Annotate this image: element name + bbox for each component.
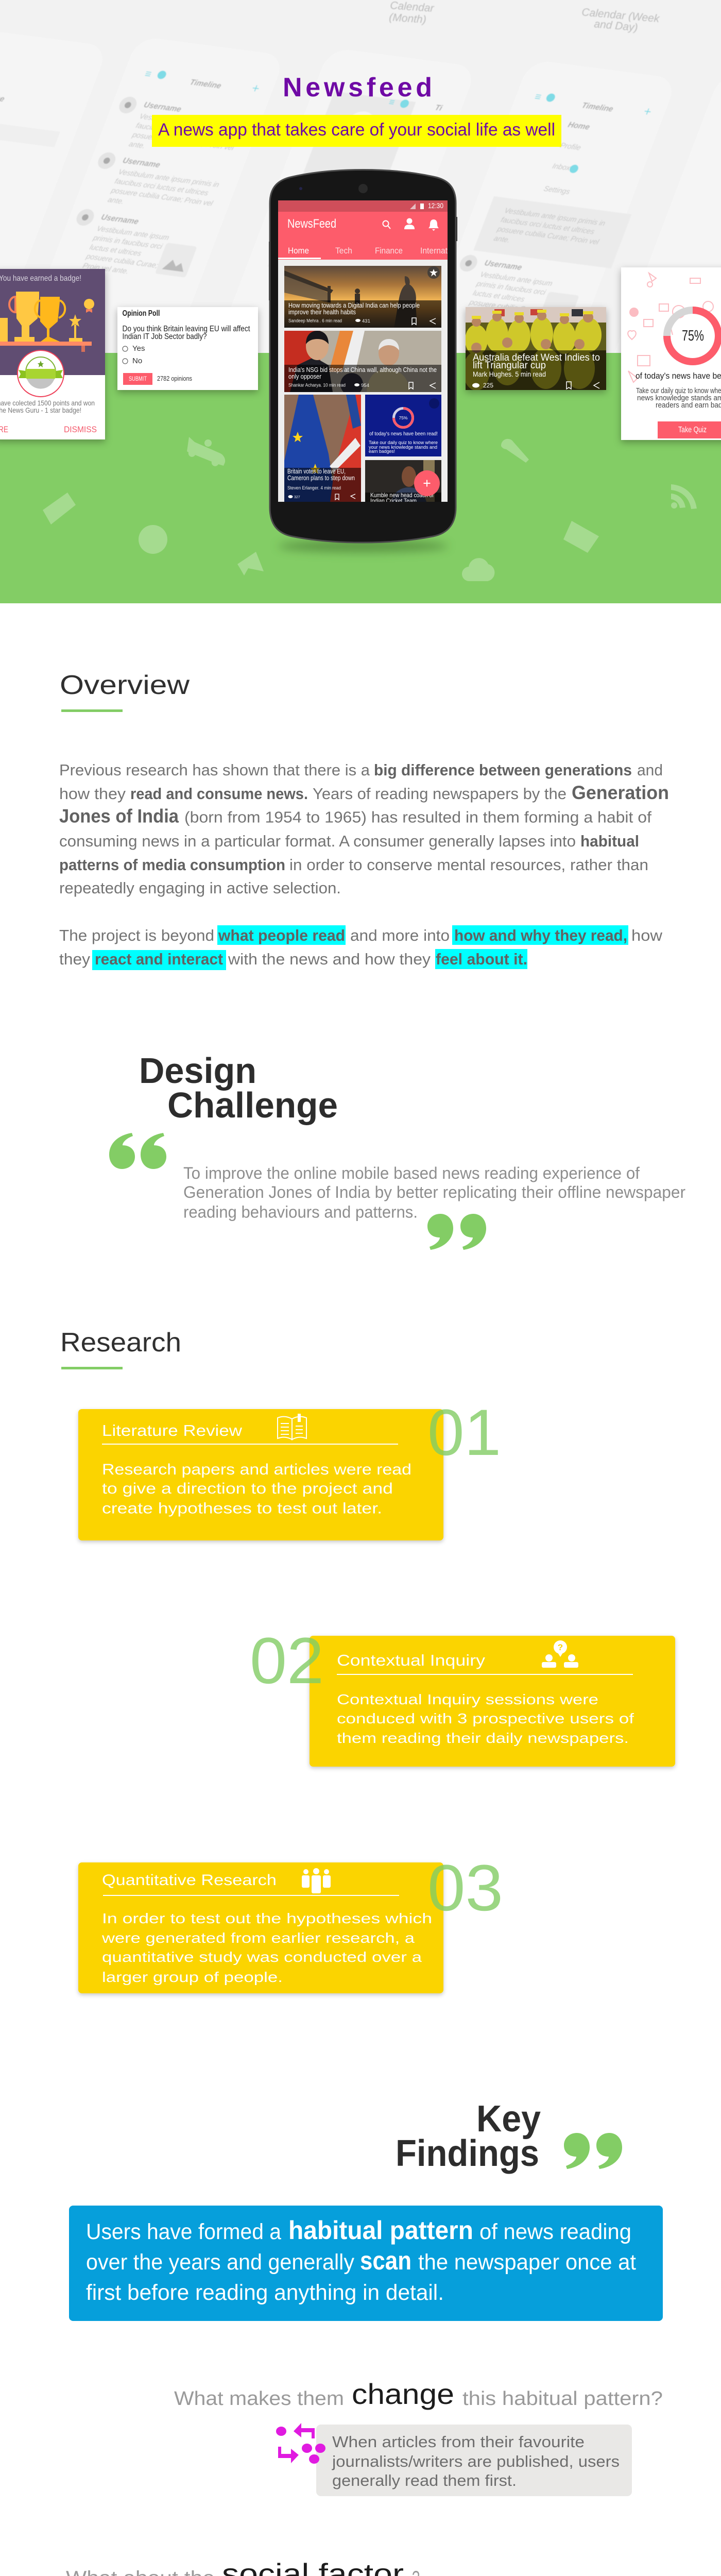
heading: overview: Overview — [60, 670, 190, 700]
article: Kumble: Indian Cricket Team — [370, 497, 417, 504]
paragraph: background: read and consume news. — [130, 785, 308, 803]
icon: closing quote — [564, 2133, 622, 2169]
article: Britain votes: Steven Erlanger. 4 min read — [287, 485, 341, 491]
paragraph: background: Years of reading newspapers by the — [313, 785, 566, 803]
wireframe phones backdrop: faucibus orci luctus et ultrices — [500, 216, 596, 236]
wireframe phones backdrop: Proin vel ante. — [81, 262, 130, 276]
card: literature review — [78, 1396, 501, 1540]
status bar — [278, 200, 448, 212]
question heading — [174, 2378, 663, 2410]
icon: basketball — [139, 525, 167, 554]
question heading: What makes them — [174, 2388, 344, 2410]
paragraph: background: in order to conserve mental resources, rather than — [289, 856, 648, 874]
wireframe phones backdrop: ante. — [492, 234, 511, 245]
card: quantitative research: were generated from earlier research, a — [101, 1930, 415, 1946]
article: Britain votes: 327 — [294, 496, 300, 499]
heading: research: Research — [60, 1328, 181, 1358]
question heading: change — [352, 2378, 454, 2410]
paragraph: project focus with highlights: how and why they read, — [454, 926, 627, 944]
article: daily quiz — [365, 395, 441, 456]
icon: newspaper — [43, 493, 76, 524]
wireframe phones backdrop: faucibus orci luctus et ultrices — [113, 177, 210, 197]
wireframe phones backdrop: Username — [121, 156, 162, 170]
paragraph: background: Previous research has shown that there is a — [59, 761, 370, 779]
app bar — [278, 212, 448, 260]
article: NSG bid: Shankar Acharya. 10 min read — [288, 382, 346, 388]
section: key findings — [69, 2098, 663, 2321]
phone mockup — [269, 170, 457, 543]
card: earned badge: DISMISS — [64, 425, 97, 434]
card: literature review: Literature Review — [102, 1421, 243, 1439]
icon: rss dot — [671, 502, 677, 509]
wireframe phones backdrop: posuere cubilia Curae; — [84, 252, 159, 270]
paragraph: background: Jones of India — [59, 806, 179, 826]
question heading — [66, 2557, 420, 2576]
icon: inquiry people: ? — [558, 1642, 563, 1652]
callout: habitual pattern: the newspaper once at — [418, 2250, 636, 2275]
article: digital india — [284, 266, 441, 328]
article: Kumble — [365, 460, 441, 504]
paragraph: project focus with highlights: react and interact — [95, 950, 223, 968]
app bar: Tech — [335, 246, 352, 256]
paragraph: project focus with highlights: and more into — [350, 926, 450, 944]
article: Britain votes: Britain votes to leave EU, — [287, 468, 346, 475]
wireframe phones backdrop: + — [641, 105, 654, 119]
wireframe phones backdrop: Proin vel ante. — [465, 308, 513, 321]
paragraph: project focus with highlights — [59, 925, 663, 970]
challenge statement — [183, 1164, 685, 1221]
icon: closing quote — [427, 1214, 486, 1250]
answer box — [316, 2425, 632, 2496]
card: opinion poll: Opinion Poll — [123, 309, 160, 318]
wireframe phones backdrop: Vestibulum ante ipsum primis in — [503, 207, 607, 228]
icon: change arrows — [276, 2423, 325, 2464]
article: digital india: How moving towards a Digital India can help people — [288, 301, 420, 309]
callout: habitual pattern: scan — [360, 2246, 411, 2275]
phone shadow — [278, 540, 448, 552]
challenge statement: Generation Jones of India by better replicating their offline newspaper — [183, 1183, 685, 1201]
card: earned badge: You have earned a badge! — [0, 274, 81, 283]
card: quantitative research: quantitative study was conducted over a — [102, 1949, 422, 1965]
card: Australia team news: 225 — [483, 382, 493, 389]
card: Australia team news — [463, 307, 606, 391]
card: literature review: Research papers and articles were read — [102, 1461, 411, 1478]
tagline banner — [152, 115, 561, 147]
hero background — [0, 0, 721, 603]
paragraph: background: how they — [59, 785, 126, 803]
paragraph: background: repeatedly engaging in active selection. — [59, 879, 341, 897]
section: design challenge — [109, 1050, 685, 1250]
wireframe phones backdrop: Home — [566, 121, 591, 132]
answer box: generally read them first. — [332, 2471, 517, 2489]
wireframe phones backdrop: Username — [483, 259, 523, 272]
floating add button — [414, 470, 440, 496]
icon: megaphone — [237, 552, 264, 575]
icon: camera — [563, 521, 599, 553]
background icons on green — [43, 437, 697, 581]
wireframe phones backdrop: ante. — [128, 140, 146, 150]
card: contextual inquiry: them reading their daily newspapers. — [337, 1730, 629, 1746]
card: daily quiz — [621, 267, 721, 440]
paragraph: project focus with highlights: The project is beyond — [59, 926, 214, 944]
icon: opening quote — [109, 1133, 166, 1169]
challenge statement: To improve the online mobile based news reading experience of — [183, 1164, 640, 1182]
wireframe phones backdrop: + — [249, 81, 262, 96]
card: quantitative research: larger group of people. — [102, 1969, 283, 1985]
number 03: 03 — [427, 1851, 503, 1924]
finding: social factor — [66, 2557, 507, 2576]
wireframe phones backdrop: and Day) — [594, 18, 638, 33]
paragraph: background: and — [637, 761, 663, 779]
paragraph: project focus with highlights: with the news and how they — [228, 950, 431, 968]
card: contextual inquiry: Contextual Inquiry — [337, 1651, 486, 1669]
icon: bell — [428, 219, 439, 231]
card: opinion poll: 2782 opinions — [157, 375, 192, 382]
heading: design challenge: Challenge — [167, 1085, 338, 1125]
article: digital india: 431 — [362, 318, 370, 324]
card: Australia team news: lift Triangular cup — [473, 360, 546, 371]
article: digital india: improve their health habits — [288, 308, 356, 316]
card: literature review: create hypotheses to test out later. — [102, 1500, 382, 1517]
wireframe phones backdrop: posuere c — [378, 178, 414, 190]
wireframe phones backdrop: Vestibulum ante ipsum primis in — [138, 112, 242, 133]
quiz donut chart: 75% — [682, 328, 704, 344]
wireframe phones backdrop: Timeline — [188, 78, 223, 91]
card: contextual inquiry: conduced with 3 prospective users of — [337, 1710, 634, 1726]
card: opinion poll: Do you think Britain leaving EU will affect — [123, 325, 250, 333]
paragraph: background: Generation — [572, 782, 669, 803]
callout: habitual pattern: habitual pattern — [288, 2216, 473, 2245]
wireframe phones backdrop: Vestibulum ante ipsum — [95, 225, 170, 242]
wireframe phones backdrop: ≡ — [387, 96, 397, 108]
finding: change — [174, 2378, 663, 2496]
wireframe phones backdrop: posuere cubilia Curae; Proin vel — [131, 131, 235, 152]
wireframe phones backdrop: posuere cubilia Curae; — [468, 298, 542, 316]
heading: key findings: Key — [476, 2098, 541, 2140]
card: contextual inquiry — [250, 1624, 675, 1767]
heading: key findings: Findings — [396, 2133, 539, 2174]
card: earned badge — [0, 269, 105, 439]
card: Australia team news: Australia defeat West Indies to — [473, 352, 600, 363]
wireframe phones backdrop: ≡ — [143, 68, 153, 80]
article: Britain votes — [284, 395, 361, 502]
number 02: 02 — [250, 1624, 324, 1697]
icon: rss feed — [671, 484, 697, 509]
wireframe phones backdrop: faucibus orci luctus et ultrices — [134, 122, 231, 142]
card: opinion poll: No — [132, 357, 142, 365]
paragraph: background: habitual — [580, 832, 639, 850]
wireframe phones backdrop: luctus et ultrices — [89, 243, 143, 258]
number 01: 01 — [427, 1396, 501, 1469]
title: Newsfeed — [283, 73, 432, 103]
paragraph: background: consuming news in a particular format. A consumer generally lapses into — [59, 832, 576, 850]
card: opinion poll: Yes — [132, 344, 145, 353]
wireframe phones backdrop: Inbox — [551, 162, 572, 173]
card: Australia team news: Mark Hughes. 5 min read — [473, 370, 546, 378]
challenge statement: reading behaviours and patterns. — [183, 1202, 418, 1221]
wireframe phones backdrop: (Month) — [389, 11, 426, 26]
trophies — [0, 292, 94, 352]
answer box: When articles from their favourite — [332, 2433, 585, 2451]
answer box: journalists/writers are published, users — [332, 2452, 620, 2470]
badge medallion — [18, 350, 64, 397]
wireframe phones backdrop: Calendar (Week — [581, 6, 661, 25]
status bar: 12:30 — [428, 201, 443, 210]
article: daily quiz: earn badges! — [369, 449, 395, 454]
article: Britain votes: Cameron plans to step down — [287, 474, 355, 482]
question heading: this habitual pattern? — [462, 2388, 663, 2410]
card: quantitative research — [78, 1851, 503, 1993]
wireframe phones backdrop: primis in faucibus orci — [475, 280, 547, 297]
wireframe phones backdrop — [0, 1, 660, 307]
wireframe phones backdrop: Username — [100, 213, 140, 226]
app bar: Finance — [375, 246, 403, 256]
card: opinion poll — [117, 307, 258, 390]
wireframe phones backdrop: ≡ — [533, 91, 543, 103]
callout: habitual pattern: first before reading anything in detail. — [86, 2280, 444, 2305]
callout: habitual pattern — [69, 2206, 663, 2321]
paragraph: project focus with highlights: what people read — [218, 926, 345, 944]
wireframe phones backdrop: luctus et ultrices — [472, 289, 526, 304]
wireframe phones backdrop: Settings — [542, 185, 571, 196]
article: NSG bid — [284, 331, 441, 396]
card: earned badge: the News Guru - 1 star badge! — [0, 406, 81, 414]
card: daily quiz: Take Quiz — [678, 426, 707, 434]
card: opinion poll: Indian IT Job Sector badly? — [123, 332, 207, 341]
article: daily quiz: your news knowledge stands and — [369, 445, 437, 450]
quiz donut chart — [667, 310, 718, 362]
icon: news van — [187, 437, 225, 466]
callout: habitual pattern: over the years and generally — [86, 2250, 354, 2275]
app screen — [278, 200, 448, 504]
heading: design challenge: Design — [139, 1050, 256, 1091]
article: digital india: Sandeep Mehra . 6 min read — [288, 318, 342, 324]
wireframe phones backdrop: posuere cubilia Curae; Proin vel — [109, 187, 214, 208]
section: research — [60, 1328, 675, 1993]
article: daily quiz: 75% — [399, 415, 408, 420]
paragraph: background: patterns of media consumption — [59, 856, 285, 874]
card: opinion poll: SUBMIT — [129, 375, 147, 382]
article: daily quiz: of today's news have been read! — [369, 431, 438, 437]
card: quantitative research: In order to test out the hypotheses which — [102, 1910, 432, 1926]
wireframe phones backdrop: Ti — [434, 104, 444, 113]
paragraph: background: (born from 1954 to 1965) has resulted in them forming a habit of — [184, 808, 651, 826]
heading: design challenge — [139, 1050, 338, 1125]
icon: open book — [278, 1414, 306, 1439]
icon: microphone — [501, 439, 529, 463]
card: literature review: to give a direction to the project and — [102, 1480, 393, 1497]
app bar: Internat — [420, 246, 448, 256]
paragraph: project focus with highlights: how — [631, 926, 663, 944]
card: quantitative research: Quantitative Research — [102, 1872, 277, 1889]
decorative pink icons — [628, 273, 713, 382]
wireframe phones backdrop: posuere cubilia Curae; Proin vel — [495, 225, 600, 247]
card: contextual inquiry: Contextual Inquiry sessions were — [337, 1691, 598, 1707]
paragraph: project focus with highlights: feel about it. — [436, 950, 527, 968]
article: NSG bid: 954 — [361, 383, 369, 388]
callout: habitual pattern: Users have formed a — [86, 2219, 281, 2244]
wireframe phones backdrop: Vestibulum ante ipsum primis in — [117, 168, 220, 189]
paragraph: background — [59, 761, 669, 897]
icon: group of people — [302, 1868, 331, 1893]
icon: profile — [404, 218, 415, 229]
app bar: NewsFeed — [287, 217, 336, 231]
tagline banner: A news app that takes care of your social life as well — [158, 120, 555, 140]
heading: key findings — [396, 2098, 541, 2174]
article: NSG bid: only opposer — [288, 372, 322, 380]
wireframe phones backdrop: Profile — [559, 142, 582, 152]
paragraph: background: big difference between generations — [374, 761, 632, 779]
wireframe phones backdrop: ante. — [107, 196, 125, 206]
article: daily quiz: Take our daily quiz to know where — [369, 440, 438, 445]
article: Kumble: Kumble new head coach of — [370, 492, 434, 499]
wireframe phones backdrop: primis in faucibus orci — [92, 234, 164, 251]
wireframe phones backdrop: Username — [143, 100, 183, 114]
wireframe phones backdrop: Timeline — [580, 101, 615, 114]
section: overview — [59, 670, 669, 970]
paragraph: project focus with highlights: they — [59, 950, 90, 968]
icon: inquiry people — [542, 1640, 578, 1668]
icon: search — [383, 221, 390, 229]
article: NSG bid: India's NSG bid stops at China wall, although China not the — [288, 366, 437, 374]
app bar: Home — [288, 246, 309, 256]
icon: cloud — [462, 558, 494, 581]
wireframe phones backdrop: Vestibulum ante ipsum — [479, 270, 554, 288]
callout: habitual pattern: of news reading — [479, 2219, 631, 2244]
